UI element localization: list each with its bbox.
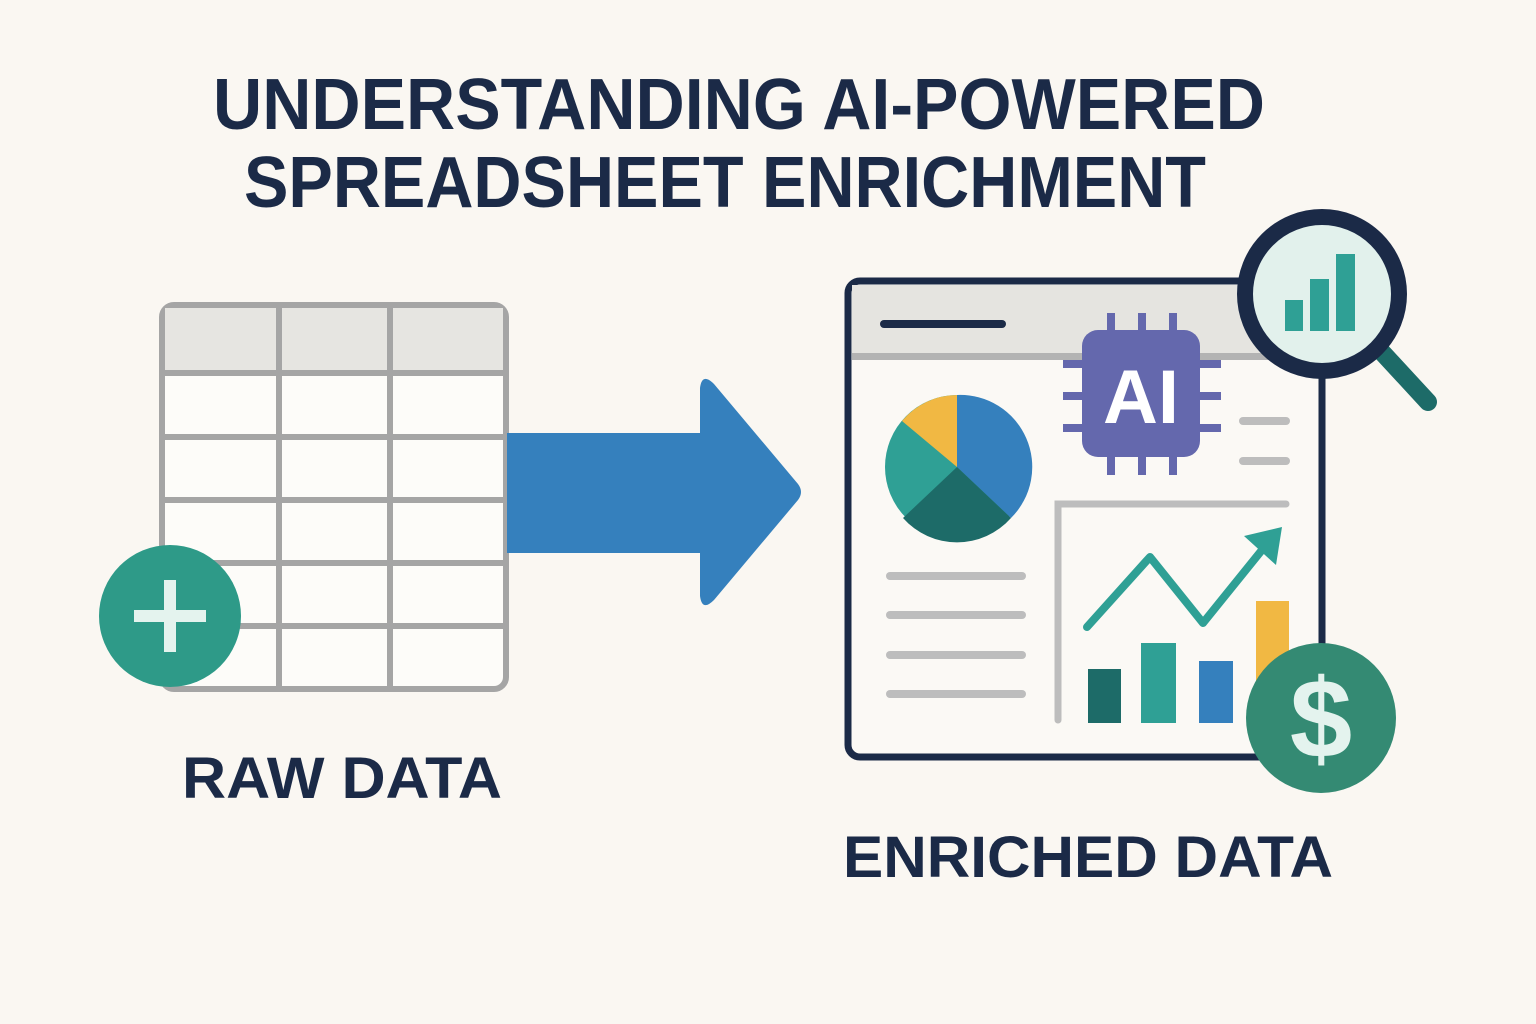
arrow [507,379,801,605]
icon: dollar circle: $ [1290,656,1352,781]
pie chart [885,395,1032,542]
raw spreadsheet [162,305,506,689]
text lines [890,421,1286,694]
label: raw data: RAW DATA [182,746,502,811]
icon: AI chip [1063,313,1221,475]
title: UNDERSTANDING AI-POWERED [213,65,1265,145]
icon: dollar circle [1246,643,1396,793]
enriched dashboard window [848,281,1322,757]
header bar line [884,320,1002,328]
title [213,65,1265,223]
icon: plus circle [99,545,241,687]
title: SPREADSHEET ENRICHMENT [244,143,1206,223]
icon: magnifier [1245,217,1428,402]
icon: AI chip: AI [1103,355,1179,440]
line and bar chart [1058,504,1289,723]
label: enriched data: ENRICHED DATA [843,825,1333,890]
